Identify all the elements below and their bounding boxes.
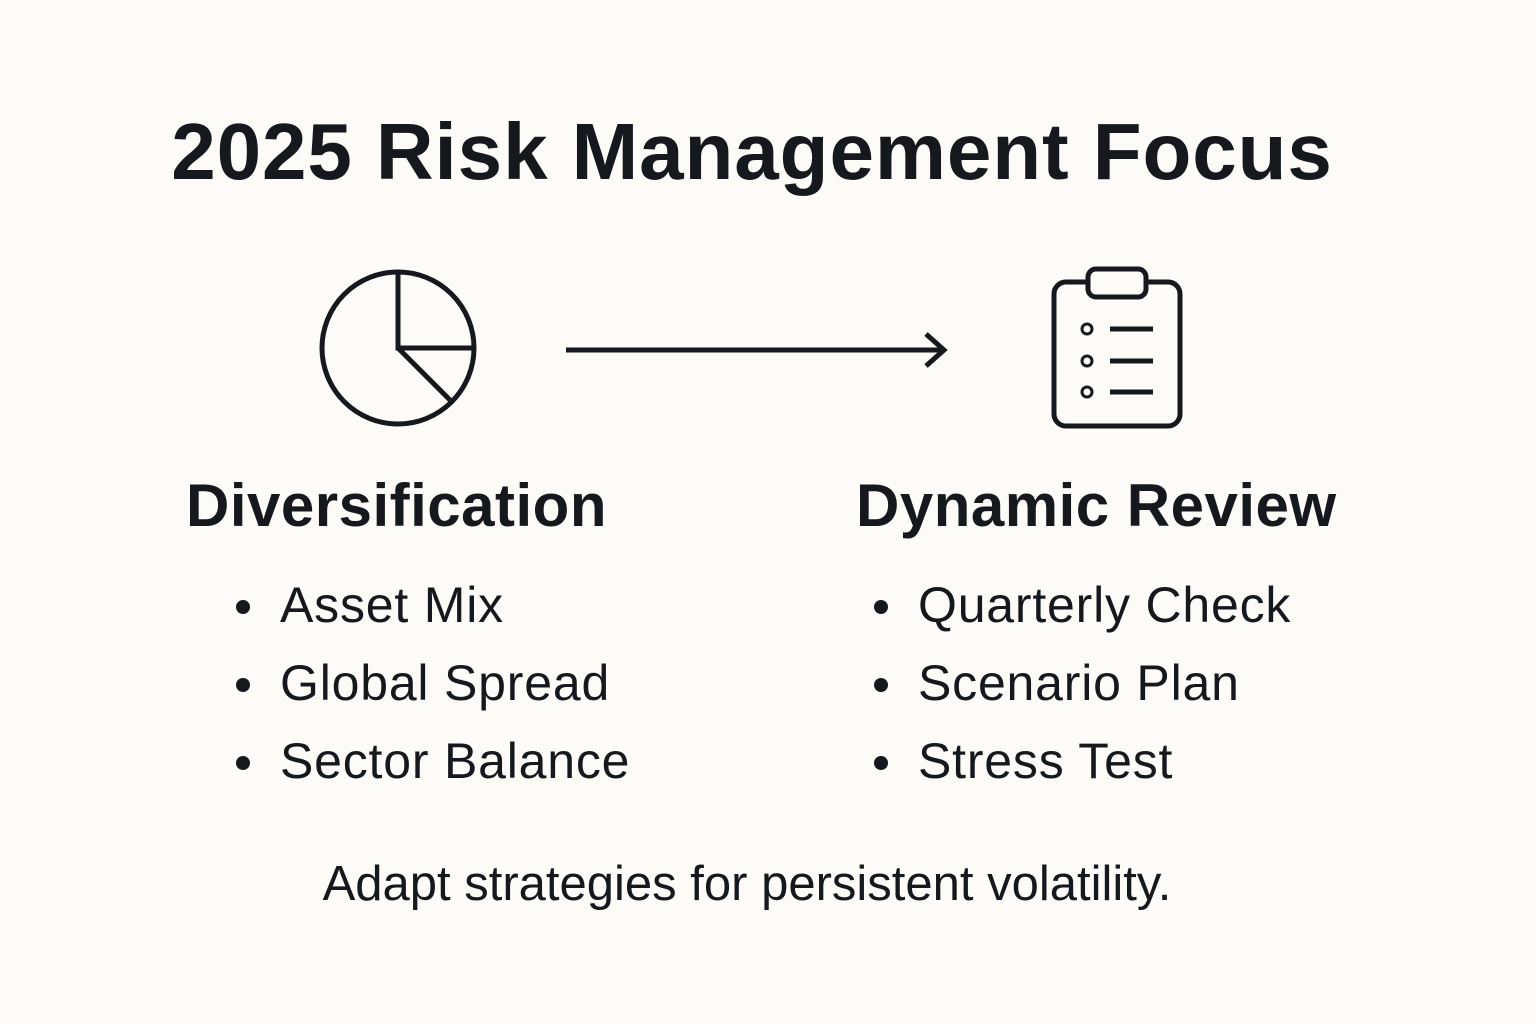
list: dynamic review: Scenario Plan [918, 655, 1240, 711]
list: dynamic review: Stress Test [918, 733, 1173, 789]
icon: pie chart [320, 270, 476, 426]
footer text: Adapt strategies for persistent volatility. [323, 857, 1171, 911]
list: diversification: Asset Mix [280, 577, 504, 633]
list: dynamic review: Quarterly Check [918, 577, 1291, 633]
icon: clipboard [1052, 266, 1182, 428]
list: dynamic review [874, 577, 1291, 789]
heading: Diversification: Diversification [186, 472, 607, 539]
list: diversification [236, 577, 630, 789]
title: 2025 Risk Management Focus [171, 107, 1333, 196]
arrow [566, 332, 948, 368]
list: diversification: Sector Balance [280, 733, 630, 789]
list: diversification: Global Spread [280, 655, 610, 711]
heading: Dynamic Review: Dynamic Review [856, 472, 1337, 539]
